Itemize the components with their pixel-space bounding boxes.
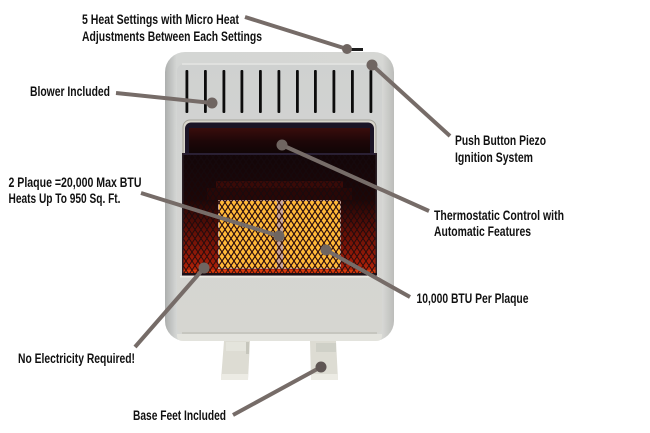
callout: no electricity xyxy=(18,262,210,366)
callout: thermostatic control: Thermostatic Control with xyxy=(434,208,564,223)
callout: BTU per plaque xyxy=(320,244,529,306)
base foot: left xyxy=(221,341,250,380)
callout: BTU per plaque: 10,000 BTU Per Plaque xyxy=(416,291,529,306)
vent slots xyxy=(186,70,372,113)
base foot: right xyxy=(310,341,338,380)
callout: heat settings: 5 Heat Settings with Micro Heat xyxy=(82,12,239,27)
callout: piezo ignition: Ignition System xyxy=(455,150,533,165)
callout: thermostatic control xyxy=(276,140,564,239)
heater body xyxy=(165,52,394,341)
ceramic plaques xyxy=(218,200,341,269)
callout: base feet xyxy=(133,362,326,423)
callout: thermostatic control: Automatic Features xyxy=(434,224,531,239)
callout: piezo ignition: Push Button Piezo xyxy=(455,133,546,148)
mesh guard and glowing firebox xyxy=(182,153,377,276)
callout: blower xyxy=(30,84,218,108)
callout: heat settings xyxy=(82,12,352,54)
callout: max BTU: Heats Up To 950 Sq. Ft. xyxy=(8,191,120,206)
callout: heat settings: Adjustments Between Each Settings xyxy=(82,29,262,44)
callout: base feet: Base Feet Included xyxy=(133,408,226,423)
firebox window xyxy=(183,120,376,162)
callout: max BTU: 2 Plaque =20,000 Max BTU xyxy=(8,175,142,190)
callout: piezo ignition xyxy=(366,60,546,165)
heater control knob xyxy=(346,48,363,51)
callout: max BTU xyxy=(8,175,284,242)
callout: no electricity: No Electricity Required! xyxy=(18,351,135,366)
callout: blower: Blower Included xyxy=(30,84,110,99)
